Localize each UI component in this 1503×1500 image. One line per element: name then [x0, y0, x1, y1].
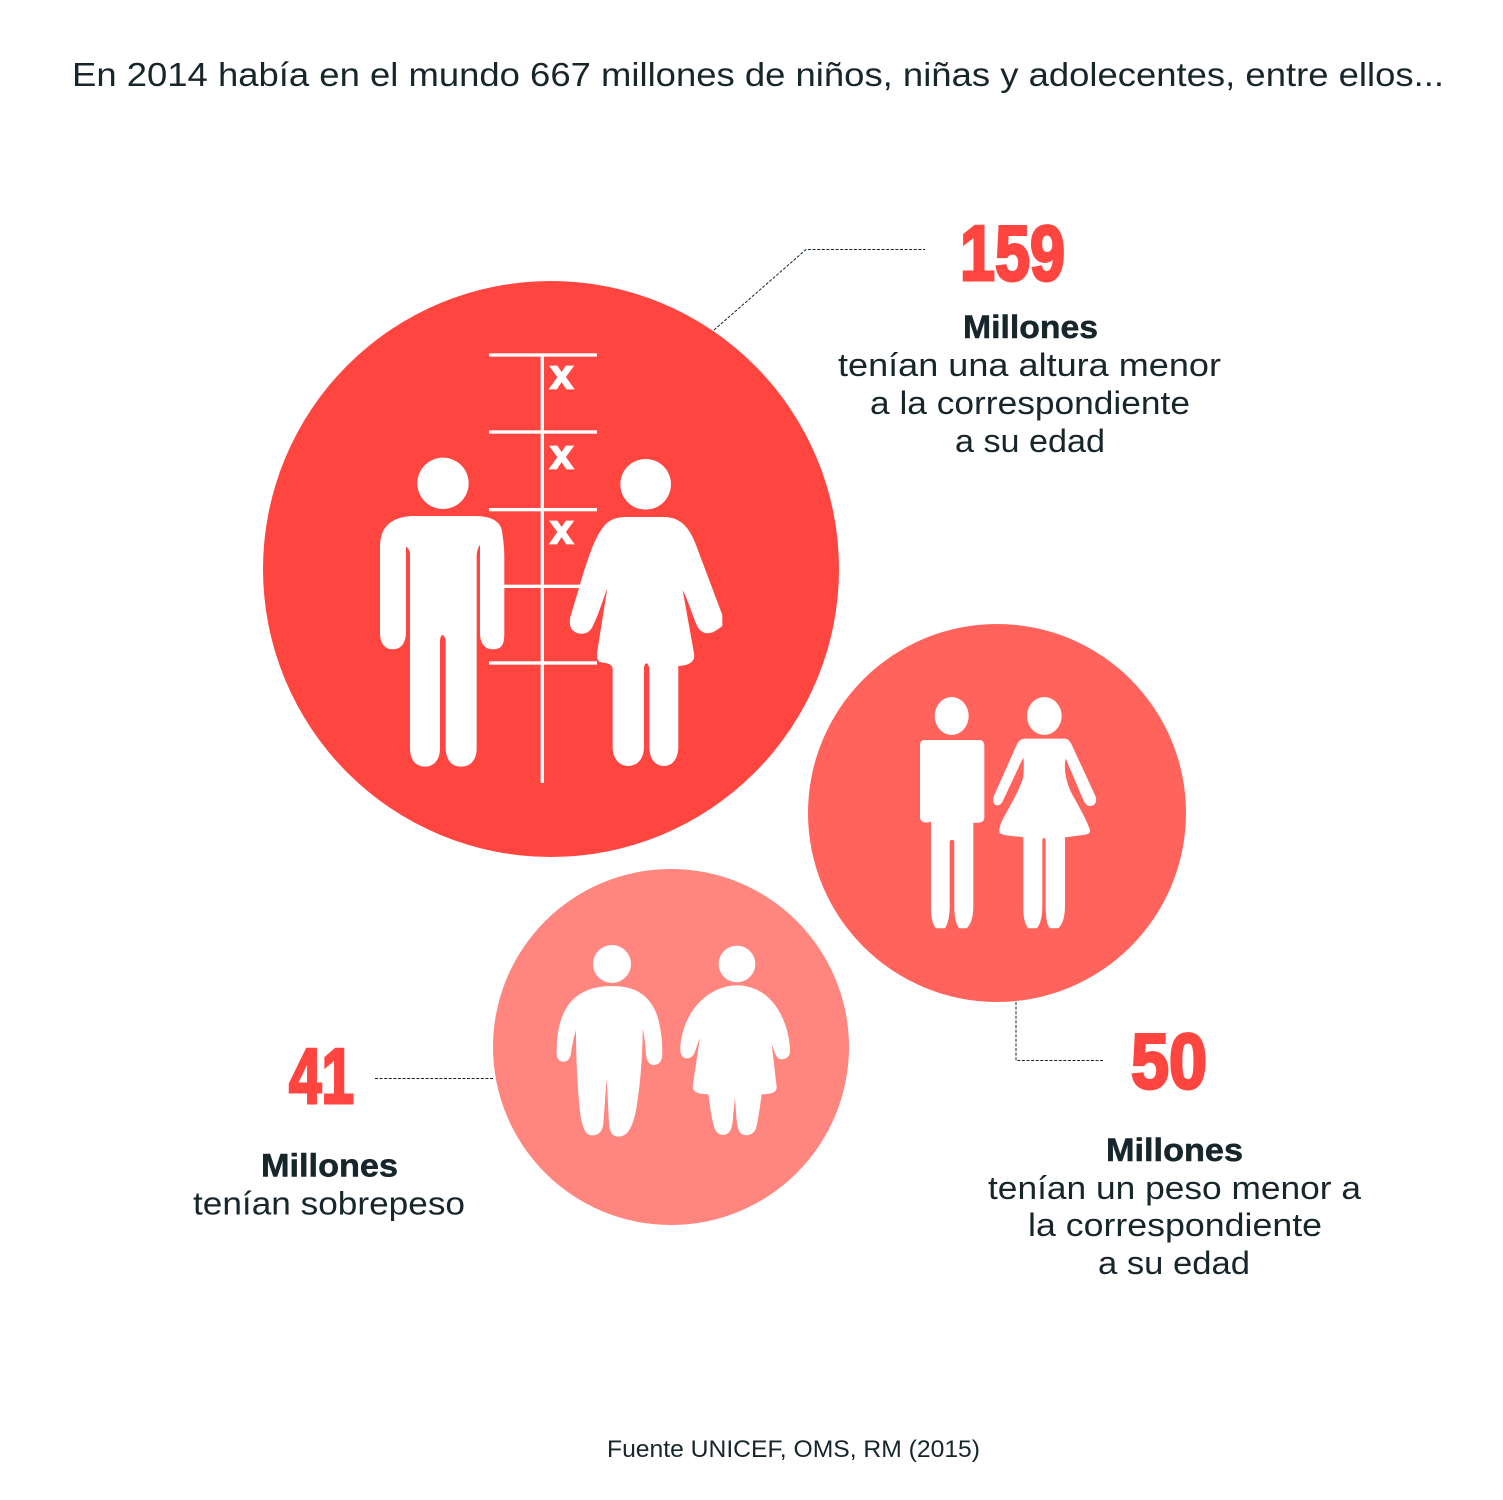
icon: short woman	[570, 459, 722, 766]
number: 159: 159	[960, 209, 1065, 297]
icon: overweight girl	[680, 946, 790, 1135]
text: 50 description: a su edad	[1098, 1245, 1250, 1281]
text: 159 description: tenían una altura menor	[838, 347, 1221, 383]
icon: short man	[380, 458, 504, 767]
icon: thin woman	[993, 697, 1096, 928]
text: 41 description: tenían sobrepeso	[193, 1186, 465, 1222]
title: En 2014 había en el mundo 667 millones de niños, niñas y adolecentes, entre ellos...	[72, 56, 1444, 93]
number: 50: 50	[1131, 1017, 1207, 1105]
connector: 159 callout	[714, 250, 925, 330]
height scale: x	[550, 431, 574, 478]
icon: overweight boy	[557, 945, 662, 1137]
icon: thin man	[920, 697, 984, 928]
number: 41: 41	[289, 1032, 354, 1120]
height scale: x	[550, 506, 574, 553]
text: 159 description: a la correspondiente	[870, 385, 1190, 421]
text: 50 description	[988, 1132, 1361, 1281]
text: 50 description: Millones	[1106, 1132, 1243, 1168]
connector: 50 callout	[1016, 1002, 1103, 1060]
height scale: x	[550, 351, 574, 398]
source: Fuente UNICEF, OMS, RM (2015)	[607, 1436, 980, 1463]
circle: overweight group	[493, 869, 849, 1225]
text: 159 description	[838, 309, 1221, 459]
text: 41 description: Millones	[261, 1148, 398, 1184]
height scale	[489, 351, 597, 783]
text: 159 description: Millones	[963, 309, 1098, 345]
circle: low weight group	[808, 624, 1186, 1002]
text: 41 description	[193, 1148, 465, 1222]
text: 50 description: tenían un peso menor a	[988, 1170, 1361, 1206]
circle: low height group	[263, 281, 839, 857]
text: 159 description: a su edad	[955, 423, 1105, 459]
text: 50 description: la correspondiente	[1028, 1207, 1322, 1243]
connector: 41 callout	[375, 1078, 494, 1080]
